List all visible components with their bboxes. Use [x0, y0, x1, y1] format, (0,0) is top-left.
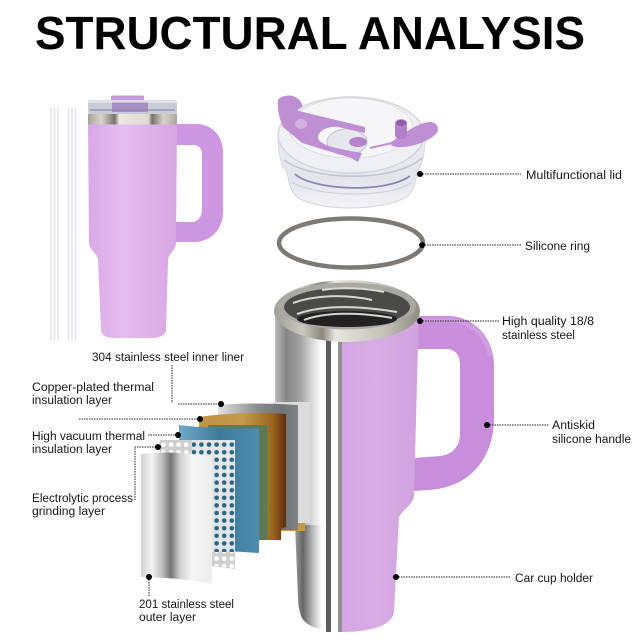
leader dots — [146, 171, 490, 580]
perforated grinding layer — [160, 440, 235, 569]
exploded wall layers — [141, 402, 310, 584]
large tumbler rim — [274, 280, 420, 342]
lid top — [278, 97, 424, 173]
lid connector — [370, 143, 392, 148]
small tumbler lid — [88, 96, 177, 114]
label: stainless steel — [502, 316, 594, 342]
label: handle: Antiskid — [552, 420, 595, 432]
label: handle: silicone handle — [552, 434, 631, 446]
label: copper layer — [32, 382, 154, 407]
steel stripes — [326, 330, 342, 632]
label: multifunctional lid: Multifunctional lid — [526, 170, 622, 182]
steel upper body — [275, 312, 343, 525]
steel lower body — [295, 525, 343, 632]
label: outer layer: 201 stainless steel — [139, 599, 234, 611]
outer white panel — [273, 402, 310, 523]
multifunctional lid — [278, 96, 438, 208]
label: vacuum layer — [32, 431, 145, 456]
label: grinding layer: grinding layer — [32, 506, 105, 518]
label: stainless steel: stainless steel — [502, 330, 575, 342]
label: grinding layer: Electrolytic process — [32, 493, 133, 505]
straws — [51, 108, 76, 340]
label: handle — [552, 420, 631, 446]
label: vacuum layer: insulation layer — [32, 444, 112, 456]
lid right tab — [390, 122, 438, 147]
label: stainless steel: High quality 18/8 — [502, 316, 594, 328]
purple half of large body — [342, 312, 419, 632]
large tumbler — [274, 280, 494, 632]
label: silicone ring: Silicone ring — [525, 241, 590, 253]
lid lower body — [278, 135, 425, 208]
large handle — [410, 316, 494, 491]
leader lines — [79, 174, 549, 596]
copper layer — [199, 413, 286, 540]
lid purple latch — [278, 96, 365, 162]
label: outer layer: outer layer — [139, 612, 196, 624]
title: STRUCTURAL ANALYSIS — [35, 7, 585, 59]
green layer — [208, 425, 267, 540]
silicone ring — [279, 218, 423, 268]
label: copper layer: Copper-plated thermal — [32, 382, 154, 394]
copper tail — [280, 523, 305, 531]
inner liner panel — [218, 404, 298, 530]
label: grinding layer — [32, 493, 133, 518]
small tumbler — [88, 96, 223, 338]
label: inner liner: 304 stainless steel inner liner — [92, 352, 244, 364]
label: car cup holder: Car cup holder — [515, 573, 593, 585]
lid drink opening — [327, 129, 367, 155]
small tumbler body — [88, 124, 177, 338]
small tumbler handle — [176, 124, 223, 242]
lid plug — [349, 137, 367, 147]
label: copper layer: insulation layer — [32, 395, 112, 407]
label: vacuum layer: High vacuum thermal — [32, 431, 145, 443]
small tumbler steel band — [88, 114, 177, 124]
blue vacuum layer — [179, 425, 259, 553]
label: outer layer — [139, 599, 234, 624]
outer steel layer — [141, 453, 212, 584]
